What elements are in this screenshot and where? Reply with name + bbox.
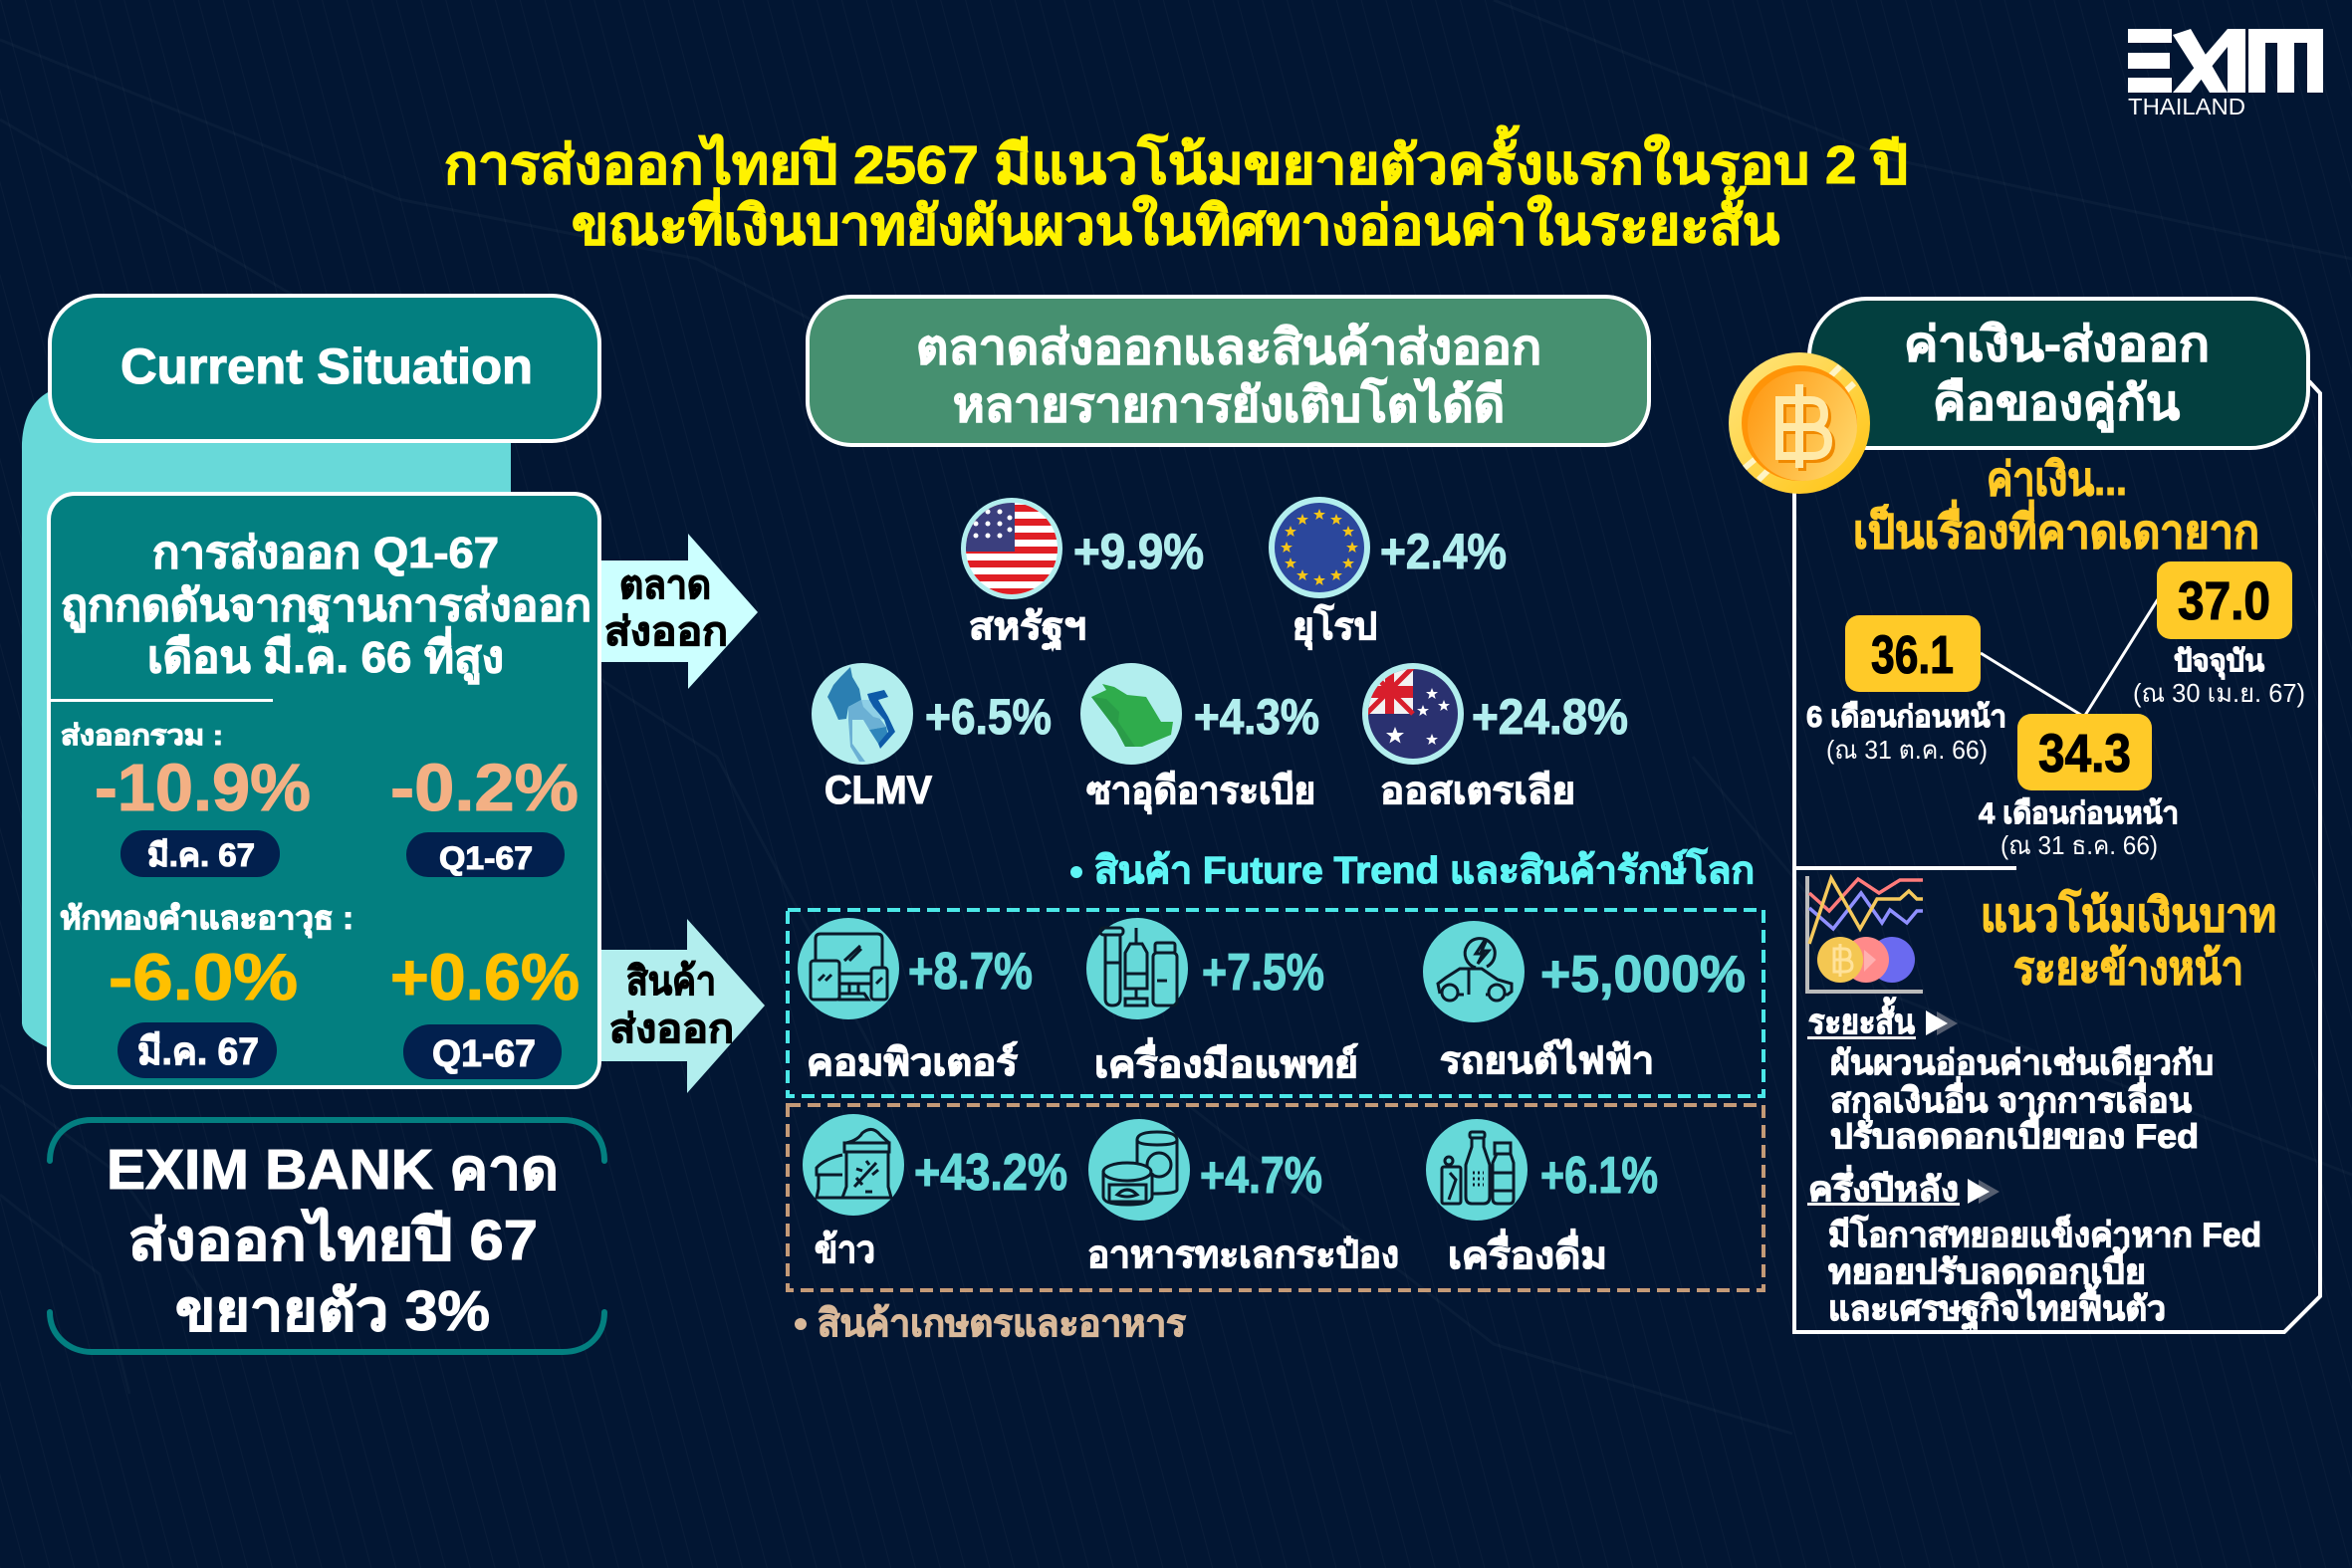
arrow: export markets: ส่งออก	[604, 610, 728, 654]
heading: currency and exports: ค่าเงิน-ส่งออก	[1904, 319, 2210, 371]
excluding gold and arms figures: -6.0%	[109, 940, 298, 1013]
chart: baht exchange rate path: 4 เดือนก่อนหน้า	[1979, 797, 2179, 830]
product: canned seafood: อาหารทะเลกระป๋อง	[1087, 1234, 1399, 1276]
total exports figures: ส่งออกรวม :	[61, 720, 223, 751]
excluding gold and arms figures: หักทองคำและอาวุธ :	[60, 900, 353, 939]
market: CLMV	[812, 663, 1052, 812]
market: Australia: +24.8%	[1472, 689, 1628, 745]
chart: baht exchange rate path: 6 เดือนก่อนหน้า	[1806, 701, 2006, 734]
product: electric vehicles: +5,000%	[1540, 946, 1746, 1004]
product: electric vehicles	[1423, 921, 1746, 1082]
product: rice: +43.2%	[914, 1144, 1067, 1202]
callout: EXIM Bank forecast	[50, 1120, 604, 1352]
heading: currency hard to predict: เป็นเรื่องที่คาดเดายาก	[1853, 500, 2259, 558]
excluding gold and arms figures	[60, 900, 580, 1079]
chart: baht exchange rate path: ปัจจุบัน	[2174, 645, 2264, 680]
product: rice	[803, 1114, 1067, 1271]
market: CLMV: +6.5%	[925, 689, 1052, 745]
heading: currency hard to predict	[1853, 453, 2259, 558]
product: medical devices: +7.5%	[1202, 944, 1324, 1002]
chart: baht exchange rate path: (ณ 31 ธ.ค. 66)	[2000, 830, 2158, 860]
market: Australia: ออสเตรเลีย	[1380, 771, 1575, 812]
chart: baht exchange rate path: 34.3	[2038, 724, 2131, 784]
text block: short term outlook: ผันผวนอ่อนค่าเช่นเดียวกับ	[1830, 1044, 2214, 1082]
product: canned seafood	[1087, 1119, 1399, 1276]
excluding gold and arms figures: +0.6%	[390, 940, 580, 1013]
market: Saudi Arabia	[1080, 663, 1319, 814]
text block: second half outlook: ครึ่งปีหลัง	[1808, 1165, 1959, 1209]
callout: EXIM Bank forecast: ขยายตัว 3%	[175, 1279, 490, 1343]
panel: future trend products	[788, 910, 1764, 1096]
heading: baht outlook: ระยะข้างหน้า	[2013, 942, 2243, 994]
heading: export markets and products: ตลาดส่งออกและสินค้าส่งออก	[916, 322, 1541, 374]
market: Europe	[1269, 497, 1507, 650]
total exports figures: -10.9%	[95, 751, 311, 825]
excluding gold and arms figures: Q1-67	[432, 1033, 536, 1075]
heading: currency hard to predict: ค่าเงิน...	[1987, 453, 2127, 505]
total exports figures: มี.ค. 67	[147, 837, 255, 873]
heading: export markets and products: หลายรายการยังเติบโตได้ดี	[953, 376, 1505, 432]
text block: short term outlook: ปรับลดดอกเบี้ยของ Fed	[1830, 1111, 2199, 1156]
market: United States: +9.9%	[1073, 524, 1204, 579]
text block: second half outlook: ทยอยปรับลดดอกเบี้ย	[1828, 1246, 2146, 1291]
market: Europe: +2.4%	[1380, 524, 1507, 579]
panel: current situation	[22, 296, 599, 1061]
legend: agricultural and food products: สินค้าเกษตรและอาหาร	[818, 1303, 1187, 1345]
market: Europe: ยุโรป	[1293, 603, 1377, 650]
chart: baht exchange rate path: 37.0	[2178, 571, 2270, 631]
panel: agricultural and food products	[788, 1105, 1764, 1290]
arrow: export products: ส่งออก	[609, 1008, 734, 1051]
text block: second half outlook	[1807, 1165, 2261, 1331]
card heading: การส่งออก Q1-67	[152, 529, 499, 577]
callout: EXIM Bank forecast: EXIM BANK คาด	[107, 1138, 559, 1202]
title	[444, 125, 1908, 256]
legend: future trend products: สินค้า Future Trend และสินค้ารักษ์โลก	[1094, 847, 1755, 892]
total exports figures: Q1-67	[439, 840, 533, 876]
chart: baht exchange rate path: (ณ 30 เม.ย. 67)	[2133, 678, 2305, 708]
product: canned seafood: +4.7%	[1200, 1147, 1322, 1205]
card heading: เดือน มี.ค. 66 ที่สูง	[147, 626, 504, 684]
text block: short term outlook: ระยะสั้น	[1808, 997, 1915, 1041]
logo: EXIM Thailand	[2128, 29, 2323, 119]
panel: Q1-67 export card	[49, 494, 599, 1087]
product: electric vehicles: รถยนต์ไฟฟ้า	[1440, 1038, 1654, 1082]
heading: export markets and products	[808, 297, 1649, 445]
chart: baht exchange rate path: (ณ 31 ต.ค. 66)	[1826, 735, 1988, 765]
market: Saudi Arabia: ซาอุดีอาระเบีย	[1086, 771, 1315, 814]
panel: currency and exports	[1729, 299, 2320, 1332]
market: CLMV: CLMV	[824, 769, 932, 812]
text block: second half outlook: มีโอกาสทยอยแข็งค่าหาก Fed	[1828, 1214, 2261, 1254]
product: medical devices	[1086, 918, 1358, 1086]
card heading: ถูกกดดันจากฐานการส่งออก	[61, 581, 591, 633]
product: beverages: +6.1%	[1540, 1147, 1658, 1205]
arrow: export products: สินค้า	[626, 960, 716, 1004]
excluding gold and arms figures: มี.ค. 67	[137, 1031, 259, 1073]
total exports figures	[61, 720, 579, 877]
logo: EXIM Thailand: THAILAND	[2128, 94, 2245, 119]
arrow: export markets	[601, 534, 758, 689]
callout: EXIM Bank forecast: ส่งออกไทยปี 67	[128, 1208, 538, 1272]
product: beverages: เครื่องดื่ม	[1448, 1229, 1607, 1277]
text block: short term outlook	[1807, 997, 2214, 1156]
market: United States	[961, 498, 1204, 651]
heading: currency and exports	[1809, 299, 2308, 448]
arrow: export products	[601, 919, 765, 1093]
heading: baht outlook: แนวโน้มเงินบาท	[1981, 888, 2276, 941]
product: computers	[798, 918, 1033, 1084]
chart: baht exchange rate path	[1806, 561, 2305, 860]
text block: second half outlook: และเศรษฐกิจไทยฟื้นตัว	[1828, 1283, 2166, 1331]
card heading	[49, 529, 591, 702]
icon: baht coin	[1729, 352, 1870, 494]
heading: currency and exports: คือของคู่กัน	[1933, 377, 2180, 433]
heading: current situation: Current Situation	[120, 338, 533, 394]
market: United States: สหรัฐฯ	[969, 606, 1086, 651]
icon: currency trend chart	[1807, 876, 1923, 992]
title: การส่งออกไทยปี 2567 มีแนวโน้มขยายตัวครั้งแรกในรอบ 2 ปี	[444, 125, 1908, 195]
market: Australia	[1362, 663, 1628, 812]
product: rice: ข้าว	[815, 1230, 875, 1271]
title: ขณะที่เงินบาทยังผันผวนในทิศทางอ่อนค่าในระยะสั้น	[572, 186, 1779, 256]
product: computers: คอมพิวเตอร์	[807, 1041, 1019, 1084]
product: beverages	[1426, 1119, 1658, 1277]
arrow: export markets: ตลาด	[619, 563, 711, 607]
text block: short term outlook: สกุลเงินอื่น จากการเลื่อน	[1830, 1076, 2192, 1122]
product: computers: +8.7%	[908, 943, 1033, 1001]
total exports figures: -0.2%	[390, 751, 579, 825]
chart: baht exchange rate path: 36.1	[1871, 625, 1954, 685]
market: Saudi Arabia: +4.3%	[1194, 689, 1319, 745]
product: medical devices: เครื่องมือแพทย์	[1094, 1037, 1358, 1086]
heading: baht outlook	[1981, 888, 2276, 994]
heading: current situation	[50, 296, 599, 441]
